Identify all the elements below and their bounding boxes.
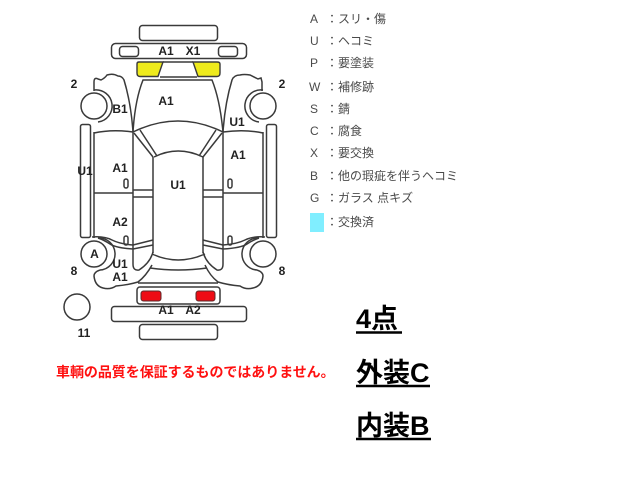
left rear wheel: [81, 237, 133, 270]
legend item U: U: [310, 34, 319, 48]
left front fender: [94, 74, 133, 132]
damage labels: A2: [185, 303, 201, 317]
left rear fender: [94, 265, 152, 289]
right front wheel: [245, 90, 276, 122]
damage labels: 8: [71, 264, 78, 278]
right side step: [266, 124, 276, 238]
damage labels: U1: [77, 164, 93, 178]
circled mark A: A: [90, 247, 99, 261]
damage labels: X1: [186, 44, 201, 58]
legend: [309, 11, 458, 232]
interior grade: 内装B: [356, 411, 430, 441]
left side step: [80, 124, 90, 238]
legend item S: ：錆: [326, 102, 350, 116]
legend item W: [309, 79, 374, 94]
right front fender: [223, 74, 262, 132]
damage labels: A1: [112, 161, 128, 175]
front bumper with fog lamps: [112, 44, 246, 58]
exterior grade: 外装C: [356, 358, 430, 388]
legend item P: ：要塗装: [326, 56, 374, 70]
overall score: 4点: [356, 304, 398, 334]
legend item P: P: [310, 56, 318, 70]
legend item W: W: [309, 80, 321, 94]
legend item X: ：要交換: [326, 146, 374, 160]
damage labels: 11: [78, 326, 91, 340]
legend item G: ：ガラス 点キズ: [326, 190, 413, 205]
legend item C: ：腐食: [326, 124, 362, 138]
legend item S: [310, 102, 350, 116]
spare tire: [64, 294, 90, 320]
left doors: [94, 131, 153, 270]
damage labels: U1: [112, 257, 128, 271]
rear panel with tail lamps: [137, 283, 220, 304]
hood: [133, 80, 223, 132]
rear window and trunk: [150, 254, 207, 270]
damage labels: A1: [158, 303, 174, 317]
car damage diagram: [64, 26, 286, 340]
legend item A: ：スリ・傷: [326, 11, 386, 26]
damage labels: 8: [279, 264, 286, 278]
legend item W: ：補修跡: [326, 79, 374, 94]
legend item replaced swatch: [310, 213, 374, 232]
legend item B: B: [310, 169, 318, 183]
damage labels: U1: [170, 178, 186, 192]
damage labels: A1: [158, 94, 174, 108]
damage labels: A2: [112, 215, 128, 229]
right rear fender: [205, 265, 263, 289]
damage labels: B1: [112, 102, 128, 116]
left front wheel: [81, 90, 112, 122]
damage labels: 2: [279, 77, 286, 91]
disclaimer: 車輌の品質を保証するものではありません。: [56, 364, 335, 380]
damage labels: U1: [229, 115, 245, 129]
legend item C: [310, 124, 362, 138]
front glass bar: [140, 26, 218, 40]
legend item U: ：ヘコミ: [326, 34, 374, 48]
legend item S: S: [310, 102, 318, 116]
right rear wheel: [223, 237, 276, 270]
legend item C: C: [310, 124, 319, 138]
damage labels: A1: [230, 148, 246, 162]
windshield and roof: [133, 121, 223, 253]
damage labels: 2: [71, 77, 78, 91]
legend item G: G: [310, 191, 319, 205]
rear bumper: [112, 306, 246, 322]
damage labels: [71, 44, 286, 340]
right doors: [203, 131, 263, 270]
damage labels: A1: [112, 270, 128, 284]
legend item A: A: [310, 12, 318, 26]
legend item X: X: [310, 146, 318, 160]
legend item replaced swatch: ：交換済: [326, 215, 374, 229]
grille and headlamps: [137, 62, 220, 77]
rear glass bar: [140, 324, 218, 340]
legend item B: ：他の瑕疵を伴うヘコミ: [326, 169, 458, 183]
damage labels: A1: [158, 44, 174, 58]
